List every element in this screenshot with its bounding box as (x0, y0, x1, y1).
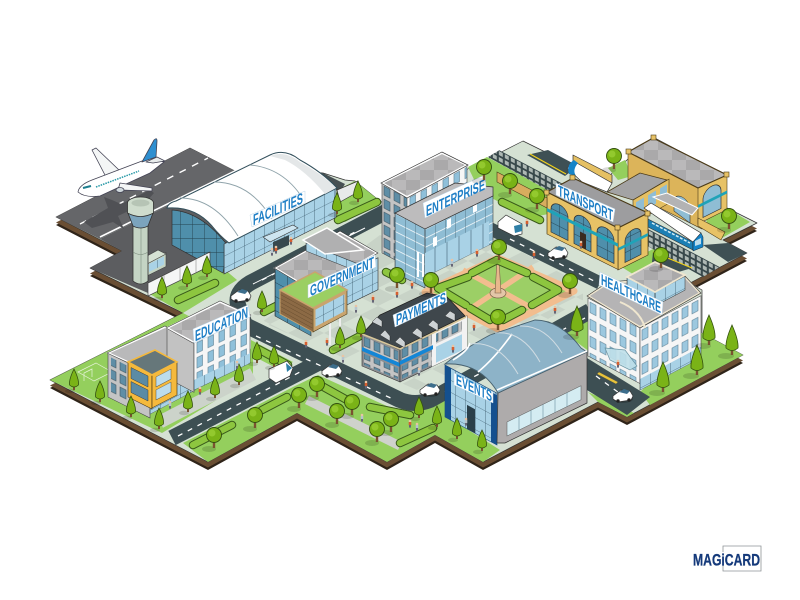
railway tracks (488, 150, 746, 277)
park plaza (425, 258, 574, 329)
white van on upper road (498, 215, 522, 236)
logo: magicard (693, 546, 761, 571)
label: transport: TRANSPORT (558, 182, 613, 225)
label: government: GOVERNMENT (310, 254, 374, 300)
label: enterprise: ENTERPRISE (426, 176, 485, 220)
building: government (274, 228, 378, 345)
trees (65, 148, 738, 454)
label: facilities (250, 190, 305, 229)
building: payments (362, 293, 467, 382)
label: education: EDUCATION (195, 304, 248, 345)
building: healthcare (587, 262, 701, 390)
label: payments (393, 289, 447, 329)
vehicles (231, 215, 633, 403)
building: events (445, 320, 587, 445)
park hedges (438, 260, 558, 320)
label: government (308, 254, 376, 300)
label: facilities: FACILITIES (253, 190, 303, 229)
airport fence (148, 252, 210, 296)
people (169, 219, 619, 431)
building: enterprise (381, 152, 493, 288)
building: transport (497, 135, 729, 270)
logo: magicard: MAGiCARD (693, 550, 760, 570)
white van on lower road (269, 361, 293, 383)
building: education (107, 301, 251, 418)
control tower (128, 197, 166, 284)
label: healthcare (599, 271, 663, 317)
paved footpaths (160, 374, 400, 446)
ground base slab (50, 137, 757, 470)
label: events: EVENTS (456, 371, 492, 406)
label: payments: PAYMENTS (396, 289, 446, 329)
roads (172, 194, 650, 438)
label: healthcare: HEALTHCARE (601, 271, 661, 317)
building: facilities hangar (167, 152, 358, 274)
airport runway and apron (56, 148, 345, 293)
label: transport (556, 182, 615, 225)
signs and labels (193, 175, 663, 406)
label: education (193, 304, 250, 345)
town hedges (178, 202, 540, 445)
label: enterprise (423, 175, 486, 220)
grass areas (50, 157, 750, 462)
airplane (78, 139, 165, 196)
label: events (454, 371, 493, 406)
